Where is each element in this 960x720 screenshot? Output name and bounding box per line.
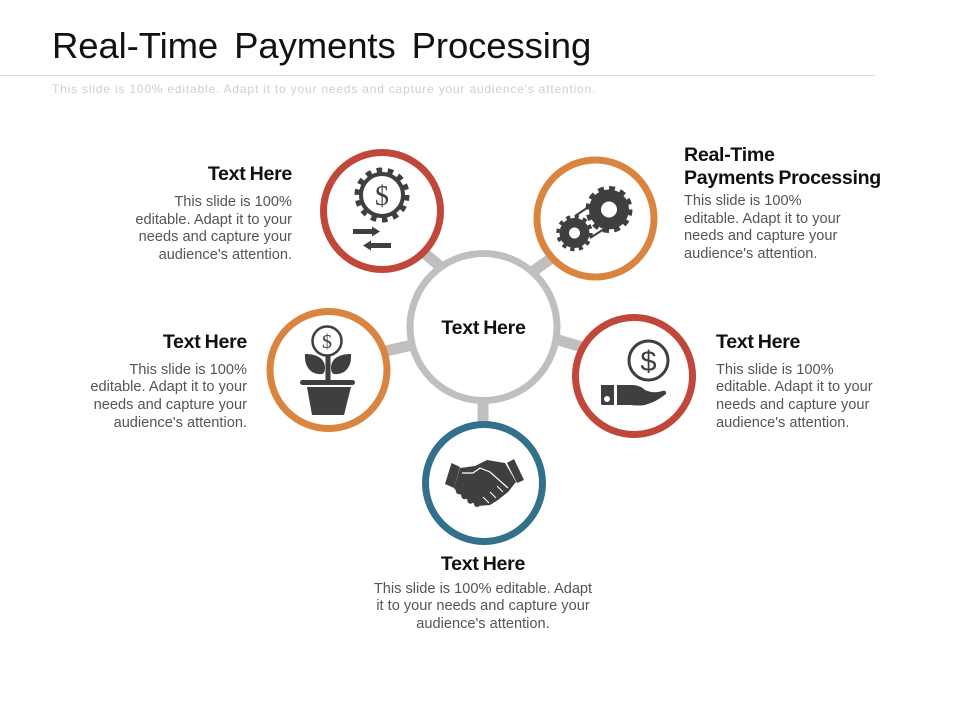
- circle: bottom blue: [426, 424, 542, 542]
- icon: gears: [558, 188, 630, 250]
- text block: right: needs and capture your: [716, 397, 869, 413]
- text block: top left: This slide is 100%: [174, 194, 292, 210]
- icon: money plant: [300, 326, 355, 415]
- title: Real-Time Payments Processing: [52, 25, 591, 66]
- icon: hand with coin: $: [640, 346, 657, 378]
- text block: bottom: it to your needs and capture your: [376, 598, 590, 614]
- icon: dollar gear with arrows: [353, 170, 407, 250]
- text block: left: [90, 331, 247, 431]
- icon: hand with coin: [601, 341, 668, 406]
- text block: bottom: This slide is 100% editable. Adapt: [374, 580, 592, 596]
- text block: top left: editable. Adapt it to your: [135, 212, 292, 228]
- center circle: [410, 254, 557, 400]
- text block: right: [716, 331, 873, 431]
- text block: top right: editable. Adapt it to your: [684, 211, 841, 227]
- text block: top left: needs and capture your: [139, 229, 292, 245]
- text block: bottom: [374, 553, 592, 632]
- text block: top right: needs and capture your: [684, 228, 837, 244]
- text block: left: This slide is 100%: [129, 362, 247, 378]
- connectors: [386, 252, 582, 424]
- text block: top right: Real-Time: [684, 144, 775, 166]
- text block: left: needs and capture your: [94, 397, 247, 413]
- text block: left: audience's attention.: [114, 415, 247, 431]
- text block: bottom: audience's attention.: [416, 616, 550, 632]
- subtitle: This slide is 100% editable. Adapt it to your needs and capture your audience's attention.: [52, 82, 596, 96]
- text block: right: Text Here: [716, 331, 800, 353]
- text block: right: editable. Adapt it to your: [716, 379, 873, 395]
- text block: top left: [135, 163, 292, 263]
- text block: right: This slide is 100%: [716, 362, 834, 378]
- text block: top right: audience's attention.: [684, 246, 817, 262]
- center label: Text Here: [441, 317, 526, 339]
- icon: dollar gear with arrows: $: [375, 181, 389, 212]
- text block: top left: audience's attention.: [159, 247, 292, 263]
- circle: top right orange: [537, 160, 654, 277]
- circle: right red: [576, 318, 692, 434]
- icon: handshake: [445, 459, 524, 507]
- text block: top left: Text Here: [208, 163, 292, 185]
- text block: top right: [684, 144, 881, 262]
- text block: left: Text Here: [163, 331, 247, 353]
- text block: right: audience's attention.: [716, 415, 849, 431]
- text block: left: editable. Adapt it to your: [90, 379, 247, 395]
- text block: top right: Payments Processing: [684, 167, 881, 189]
- text block: bottom: Text Here: [441, 553, 525, 575]
- icon: money plant: $: [322, 331, 332, 353]
- circle: left orange: [270, 312, 387, 428]
- circle: top left red: [324, 152, 440, 270]
- text block: top right: This slide is 100%: [684, 193, 802, 209]
